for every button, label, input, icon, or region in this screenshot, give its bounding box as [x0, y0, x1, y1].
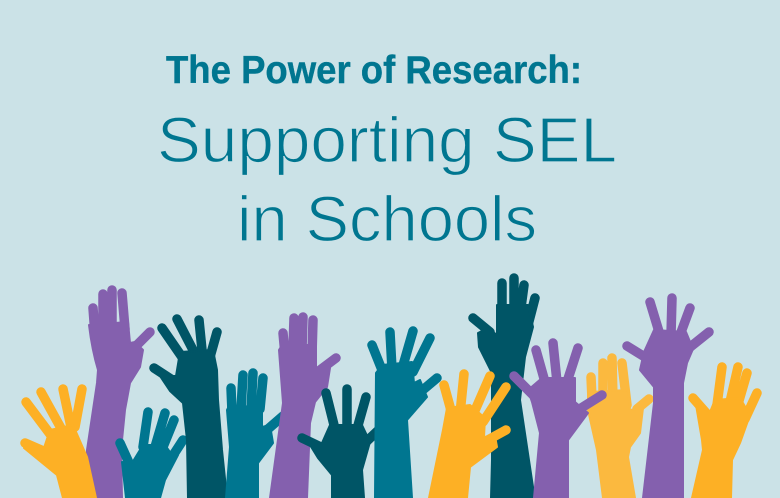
hand: teal centre — [372, 331, 437, 498]
hand: teal centre left — [226, 373, 283, 498]
heading: The Power of Research: The Power of Research: — [166, 49, 582, 92]
title — [157, 49, 617, 255]
hand: purple centre — [270, 317, 336, 498]
hand: yellow far left — [24, 389, 96, 498]
hand: dark teal tall right — [473, 278, 535, 498]
hand: dark teal small centre — [302, 389, 386, 498]
hand: purple lower right — [514, 343, 602, 498]
hand: yellow far right — [692, 367, 757, 498]
heading line: in Schools: in Schools — [237, 183, 537, 255]
hand: dark teal — [154, 319, 227, 498]
heading line: Supporting SEL: Supporting SEL — [157, 104, 617, 176]
raised hands illustration — [24, 278, 757, 498]
hand: purple right — [627, 298, 709, 498]
hand: light yellow — [588, 358, 649, 498]
hand: teal lower left — [120, 412, 183, 498]
hand: yellow centre right — [429, 374, 506, 498]
hand: purple tall left — [87, 290, 150, 498]
